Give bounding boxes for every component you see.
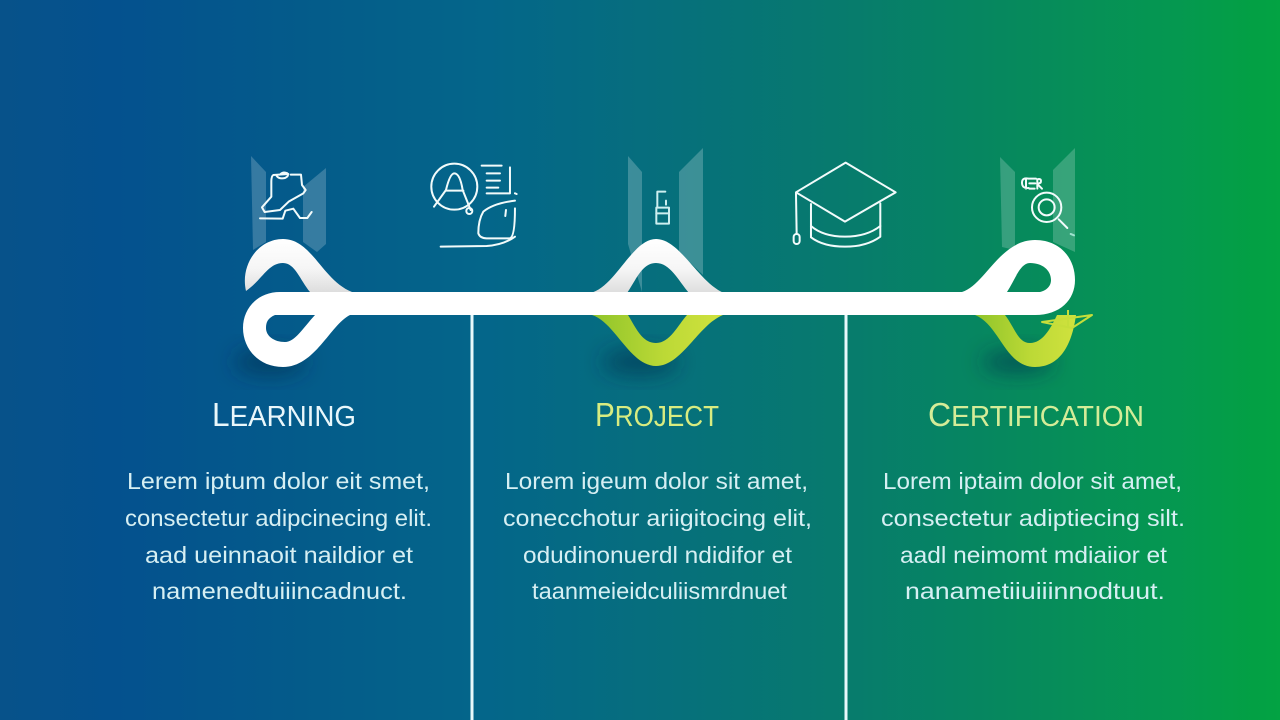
body text: certification: consectetur adiptiecing silt. xyxy=(881,505,1185,531)
white upper hook: learning xyxy=(245,239,352,292)
body text: learning: namenedtuiiincadnuct. xyxy=(152,578,407,604)
body text: project: Lorem igeum dolor sit amet, xyxy=(505,468,808,494)
ribbon shadows xyxy=(234,348,1054,376)
translucent banner: certification xyxy=(1000,148,1075,252)
icon: small arrow on certification wave xyxy=(1042,310,1092,328)
heading: learning: LEARNING xyxy=(212,396,356,433)
green lower wave: certification xyxy=(975,315,1076,367)
heading: project: PROJECT xyxy=(595,396,719,433)
body text: certification: aadl neimomt mdiaiior et xyxy=(900,542,1168,568)
body text: project: taanmeieidculiismrdnuet xyxy=(532,578,788,604)
column dividers xyxy=(470,315,848,720)
white upper hump: project xyxy=(590,239,724,293)
column: project xyxy=(503,396,812,604)
column: certification xyxy=(881,396,1185,604)
icon: learning boot outline xyxy=(260,172,312,219)
column: learning xyxy=(125,396,432,604)
icon: study document and laptop xyxy=(431,164,517,247)
body text: project xyxy=(503,468,812,604)
translucent banner: project xyxy=(628,148,703,292)
body text: learning: Lerem iptum dolor eit smet, xyxy=(127,468,430,494)
body text: project: odudinonuerdl ndidifor et xyxy=(523,542,793,568)
translucent banner: learning xyxy=(251,156,326,252)
body text: learning: consectetur adipcinecing elit. xyxy=(125,505,432,531)
body text: learning xyxy=(125,468,432,604)
icon: graduation cap xyxy=(794,163,896,247)
icon: certification magnifier xyxy=(1022,178,1074,235)
body text: certification: nanametiiuiiinnodtuut. xyxy=(905,578,1165,604)
body text: project: conecchotur ariigitocing elit, xyxy=(503,505,812,531)
white ribbon timeline bar with end loops xyxy=(243,240,1075,367)
heading: certification: CERTIFICATION xyxy=(928,396,1144,433)
body text: certification: Lorem iptaim dolor sit amet, xyxy=(883,468,1182,494)
green lower wave: project xyxy=(592,315,723,366)
icon: project padlock glyph xyxy=(656,192,669,224)
body text: learning: aad ueinnaoit naildior et xyxy=(145,542,414,568)
body text: certification xyxy=(881,468,1185,604)
